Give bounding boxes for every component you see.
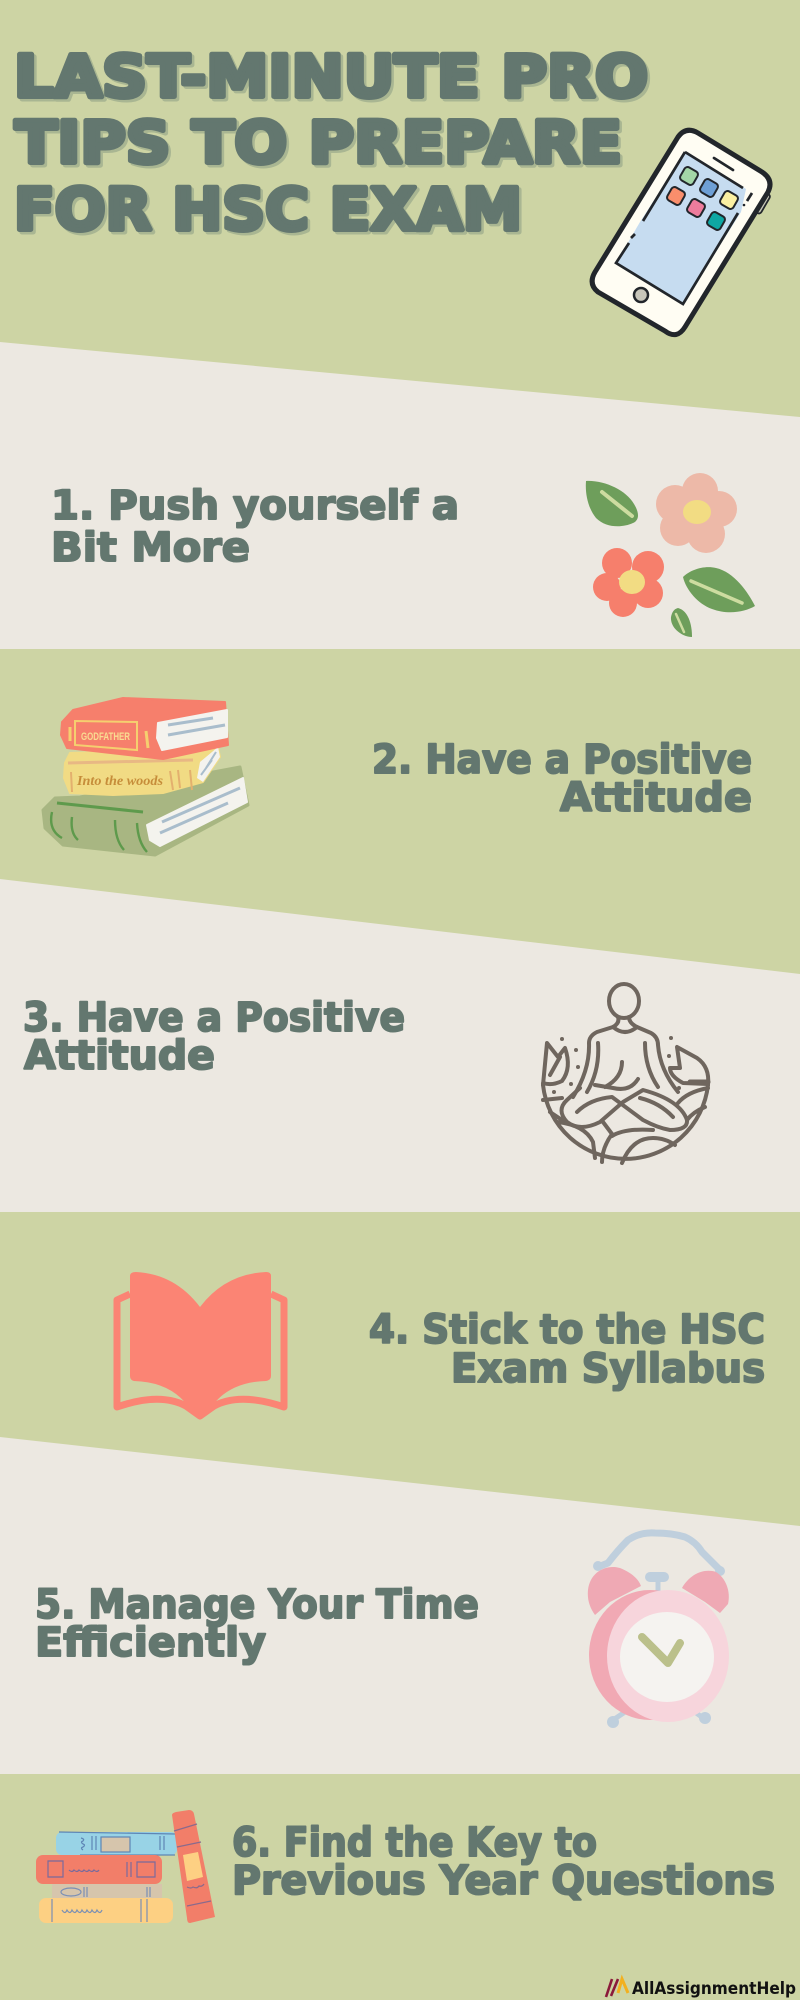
- tip 2 heading: 2. Have a Positive: [372, 737, 752, 783]
- book title: Godfather: GODFATHER: [81, 731, 130, 743]
- tip 1 heading: 1. Push yourself a: [51, 483, 459, 529]
- tip 5 heading: 5. Manage Your Time: [35, 1582, 479, 1628]
- title: LAST-MINUTE PRO: [14, 42, 648, 110]
- tip 2 heading: [372, 737, 752, 821]
- icon: open book: [117, 1272, 284, 1416]
- icon: stack of four books: [36, 1810, 215, 1923]
- tip 4 heading: Exam Syllabus: [451, 1346, 765, 1392]
- icon: meditating figure: [543, 984, 708, 1163]
- panel: tip 3 background: [0, 879, 800, 1212]
- tip 5 heading: Efficiently: [35, 1620, 266, 1666]
- tip 1 heading: Bit More: [51, 525, 250, 571]
- tip 3 heading: Attitude: [24, 1033, 215, 1079]
- tip 6 heading: [232, 1820, 775, 1904]
- tip 3 heading: 3. Have a Positive: [23, 995, 405, 1041]
- title: [14, 42, 650, 246]
- tip 5 heading: [35, 1582, 479, 1666]
- icon: flowers and leaves: [586, 473, 755, 637]
- title: FOR HSC EXAM: [14, 176, 522, 244]
- tip 6 heading: 6. Find the Key to: [232, 1820, 597, 1866]
- phone app tiles: [666, 166, 739, 231]
- title: TIPS TO PREPARE: [15, 108, 622, 176]
- book title: Into the woods: Into the woods: [76, 774, 164, 789]
- icon: smartphone: [592, 130, 771, 335]
- tip 6 heading: Previous Year Questions: [232, 1858, 775, 1904]
- title: LAST-MINUTE PRO: [16, 45, 650, 113]
- tip 2 heading: Attitude: [560, 775, 752, 821]
- tip 4 heading: [369, 1307, 765, 1392]
- tip 1 heading: [51, 483, 459, 571]
- panel: tip 1 background: [0, 342, 800, 649]
- title: TIPS TO PREPARE: [18, 111, 624, 179]
- tip 4 heading: 4. Stick to the HSC: [369, 1307, 765, 1353]
- panel: tip 5 background: [0, 1437, 800, 1774]
- tip 3 heading: [23, 995, 405, 1079]
- icon: alarm clock: [588, 1533, 729, 1728]
- title: FOR HSC EXAM: [16, 178, 524, 246]
- icon: stack of three books: [43, 698, 248, 855]
